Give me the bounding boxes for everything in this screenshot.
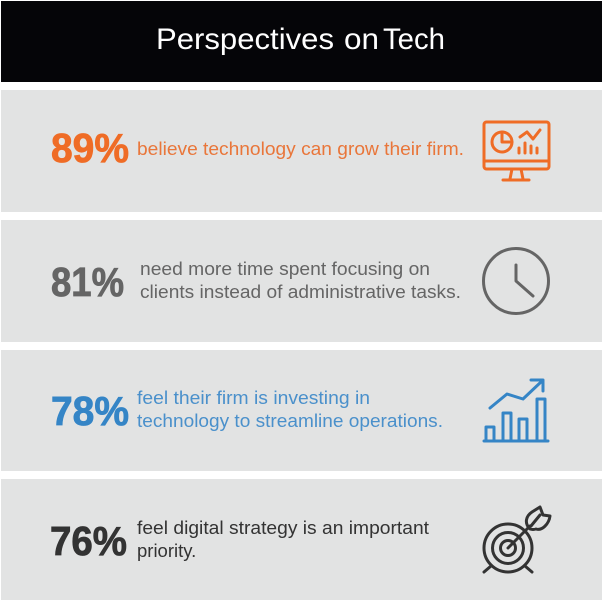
- stat: 89%: 89%: [51, 125, 129, 171]
- icon: clock: [484, 248, 548, 314]
- text: digital strategy: feel digital strategy is an important: [137, 517, 429, 538]
- panel: client time: [1, 220, 602, 342]
- stat: 76%: 76%: [50, 518, 127, 564]
- icon: target with arrow: [484, 507, 550, 572]
- panel: technology growth: [1, 90, 602, 212]
- icon: growth bar chart: [484, 380, 548, 441]
- text: technology growth: believe technology can grow their firm.: [137, 138, 464, 159]
- text: technology investment: feel their firm is investing in: [137, 387, 370, 408]
- title: [156, 23, 445, 56]
- text: digital strategy: priority.: [137, 540, 196, 561]
- stat: 81%: 81%: [51, 259, 124, 305]
- text: client time: clients instead of administrative tasks.: [140, 281, 461, 302]
- panel: digital strategy: [1, 479, 602, 600]
- text: client time: need more time spent focusing on: [140, 258, 430, 279]
- stat: 78%: 78%: [51, 388, 129, 434]
- icon: monitor with charts: [484, 122, 549, 180]
- title: on: [344, 23, 379, 56]
- text: technology investment: technology to streamline operations.: [137, 410, 443, 431]
- title: Tech: [383, 23, 445, 56]
- panel: technology investment: [1, 350, 602, 471]
- text: digital strategy: [137, 517, 429, 561]
- text: client time: [140, 258, 461, 302]
- title: Perspectives: [156, 23, 334, 56]
- text: technology investment: [137, 387, 443, 431]
- header: [1, 1, 602, 82]
